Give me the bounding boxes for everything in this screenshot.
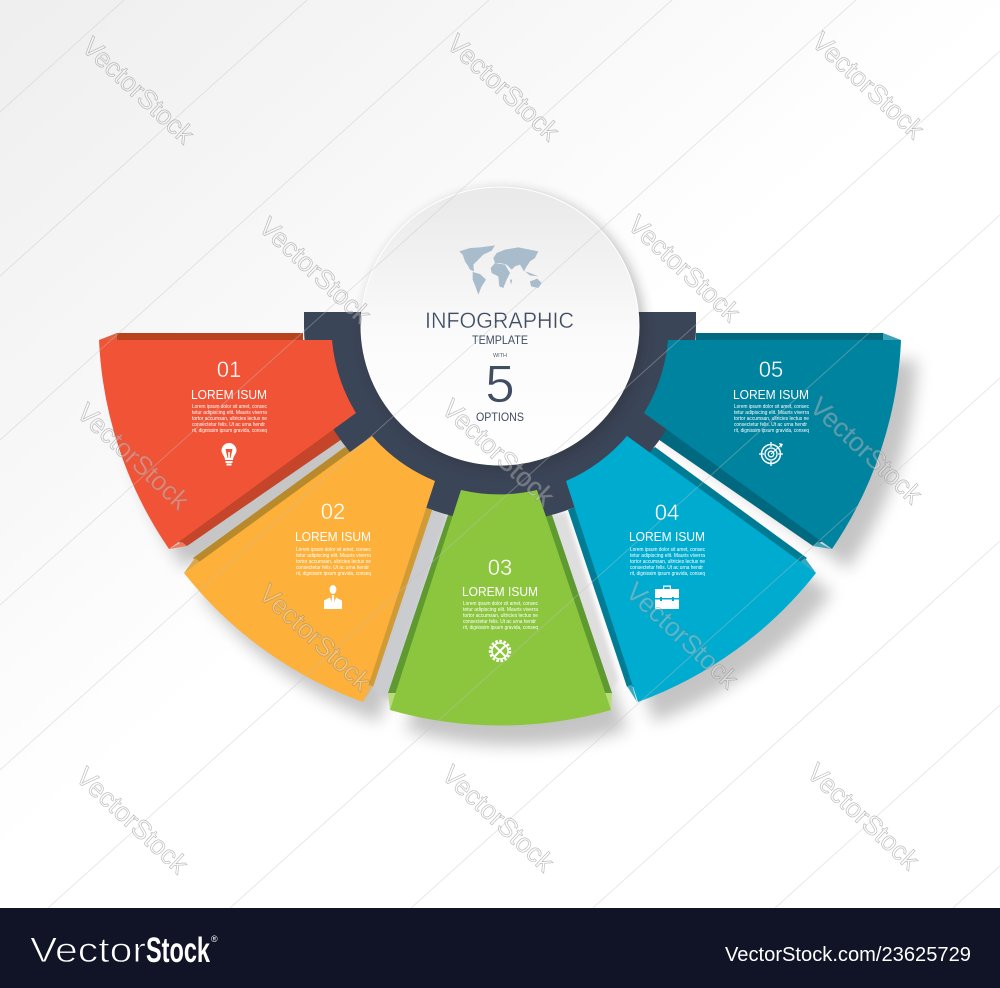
central circle: [361, 187, 639, 465]
panel 01 red segment: [99, 340, 356, 549]
watermarks: VectorStock: [253, 578, 378, 697]
text block 03: tortor accumsan, ultricies lectus ne: [463, 613, 538, 619]
text block 05: [733, 357, 810, 434]
text block 01: rit, dignissim ipsum gravida, conseq: [192, 428, 267, 434]
panel 02 orange segment: [184, 436, 435, 702]
icon: gear: [490, 641, 510, 661]
text block 02: consectetur felis. Ut ac urna hendr: [296, 565, 369, 571]
center number: 5: [485, 355, 515, 414]
text block 03: 03: [488, 555, 512, 580]
dark half ring: [304, 312, 696, 522]
footer bar: Stock: [146, 931, 210, 970]
footer bar: VectorStock.com/23625729: [725, 944, 971, 966]
text block 01: tetur adipiscing elit. Mauris viverra: [192, 410, 268, 416]
text block 01: LOREM ISUM: [191, 388, 267, 402]
watermarks: VectorStock: [441, 28, 566, 147]
text block 05: LOREM ISUM: [733, 388, 809, 402]
central circle shadow: [364, 190, 644, 470]
text block 03: consectetur felis. Ut ac urna hendr: [463, 619, 536, 625]
text block 03: rit, dignissim ipsum gravida, conseq: [463, 625, 538, 631]
text block 04: 04: [655, 500, 679, 525]
watermarks: VectorStock: [71, 397, 196, 516]
text block 05: consectetur felis. Ut ac urna hendr: [734, 422, 807, 428]
icon: businessman: [324, 585, 342, 609]
footer bar: Vector: [30, 931, 146, 970]
center with label: WITH: [493, 353, 507, 359]
icon: briefcase: [655, 586, 679, 609]
panel 03 green segment: [390, 490, 611, 726]
center title: INFOGRAPHIC: [425, 308, 574, 333]
text block 02: 02: [321, 499, 345, 524]
text block 05: tetur adipiscing elit. Mauris viverra: [734, 410, 810, 416]
icon: world map: [459, 245, 542, 295]
panel folds: dark side strips: [99, 333, 901, 710]
text block 03: tetur adipiscing elit. Mauris viverra: [463, 607, 539, 613]
text block 04: rit, dignissim ipsum gravida, conseq: [630, 571, 705, 577]
watermarks: VectorStock: [436, 393, 561, 512]
text block 04: consectetur felis. Ut ac urna hendr: [630, 565, 703, 571]
text block 05: Lorem ipsum dolor sit amet, consec: [734, 404, 809, 410]
watermarks: VectorStock: [801, 757, 926, 876]
text block 01: 01: [217, 357, 241, 382]
watermarks: VectorStock: [70, 761, 195, 880]
watermarks: VectorStock: [76, 31, 201, 150]
text block 01: consectetur felis. Ut ac urna hendr: [192, 422, 265, 428]
text block 02: LOREM ISUM: [295, 530, 371, 544]
center options label: OPTIONS: [476, 412, 524, 424]
text block 04: tortor accumsan, ultricies lectus ne: [630, 559, 705, 565]
text block 02: tetur adipiscing elit. Mauris viverra: [296, 553, 372, 559]
panel 04 blue segment: [566, 436, 816, 702]
text block 03: LOREM ISUM: [462, 585, 538, 599]
text block 01: [191, 357, 268, 434]
text block 02: rit, dignissim ipsum gravida, conseq: [296, 571, 371, 577]
text block 03: [462, 555, 539, 631]
panel shadows: [115, 360, 917, 746]
watermarks: VectorStock: [622, 209, 747, 328]
text block 04: Lorem ipsum dolor sit amet, consec: [630, 547, 705, 553]
text block 04: [629, 500, 706, 577]
text block 04: LOREM ISUM: [629, 530, 705, 544]
watermarks: VectorStock: [806, 26, 931, 145]
icon: target: [759, 442, 783, 466]
text block 04: tetur adipiscing elit. Mauris viverra: [630, 553, 706, 559]
watermarks: VectorStock: [620, 576, 745, 695]
footer bar: [0, 908, 1000, 988]
panel 05 teal segment: [644, 340, 901, 549]
text block 05: rit, dignissim ipsum gravida, conseq: [734, 428, 809, 434]
text block 02: [295, 499, 372, 577]
watermarks: VectorStock: [804, 391, 929, 510]
icon: light bulb: [222, 443, 236, 466]
watermarks: VectorStock: [436, 759, 561, 878]
text block 01: tortor accumsan, ultricies lectus ne: [192, 416, 267, 422]
grey gaps between panels: [187, 442, 618, 700]
text block 05: tortor accumsan, ultricies lectus ne: [734, 416, 809, 422]
watermarks: VectorStock: [253, 211, 378, 330]
watermarks: [70, 26, 931, 880]
text block 02: Lorem ipsum dolor sit amet, consec: [296, 547, 371, 553]
text block 02: tortor accumsan, ultricies lectus ne: [296, 559, 371, 565]
text block 01: Lorem ipsum dolor sit amet, consec: [192, 404, 267, 410]
text block 05: 05: [759, 357, 783, 382]
footer bar: ®: [211, 934, 218, 944]
center subtitle: TEMPLATE: [472, 335, 528, 347]
text block 03: Lorem ipsum dolor sit amet, consec: [463, 601, 538, 607]
